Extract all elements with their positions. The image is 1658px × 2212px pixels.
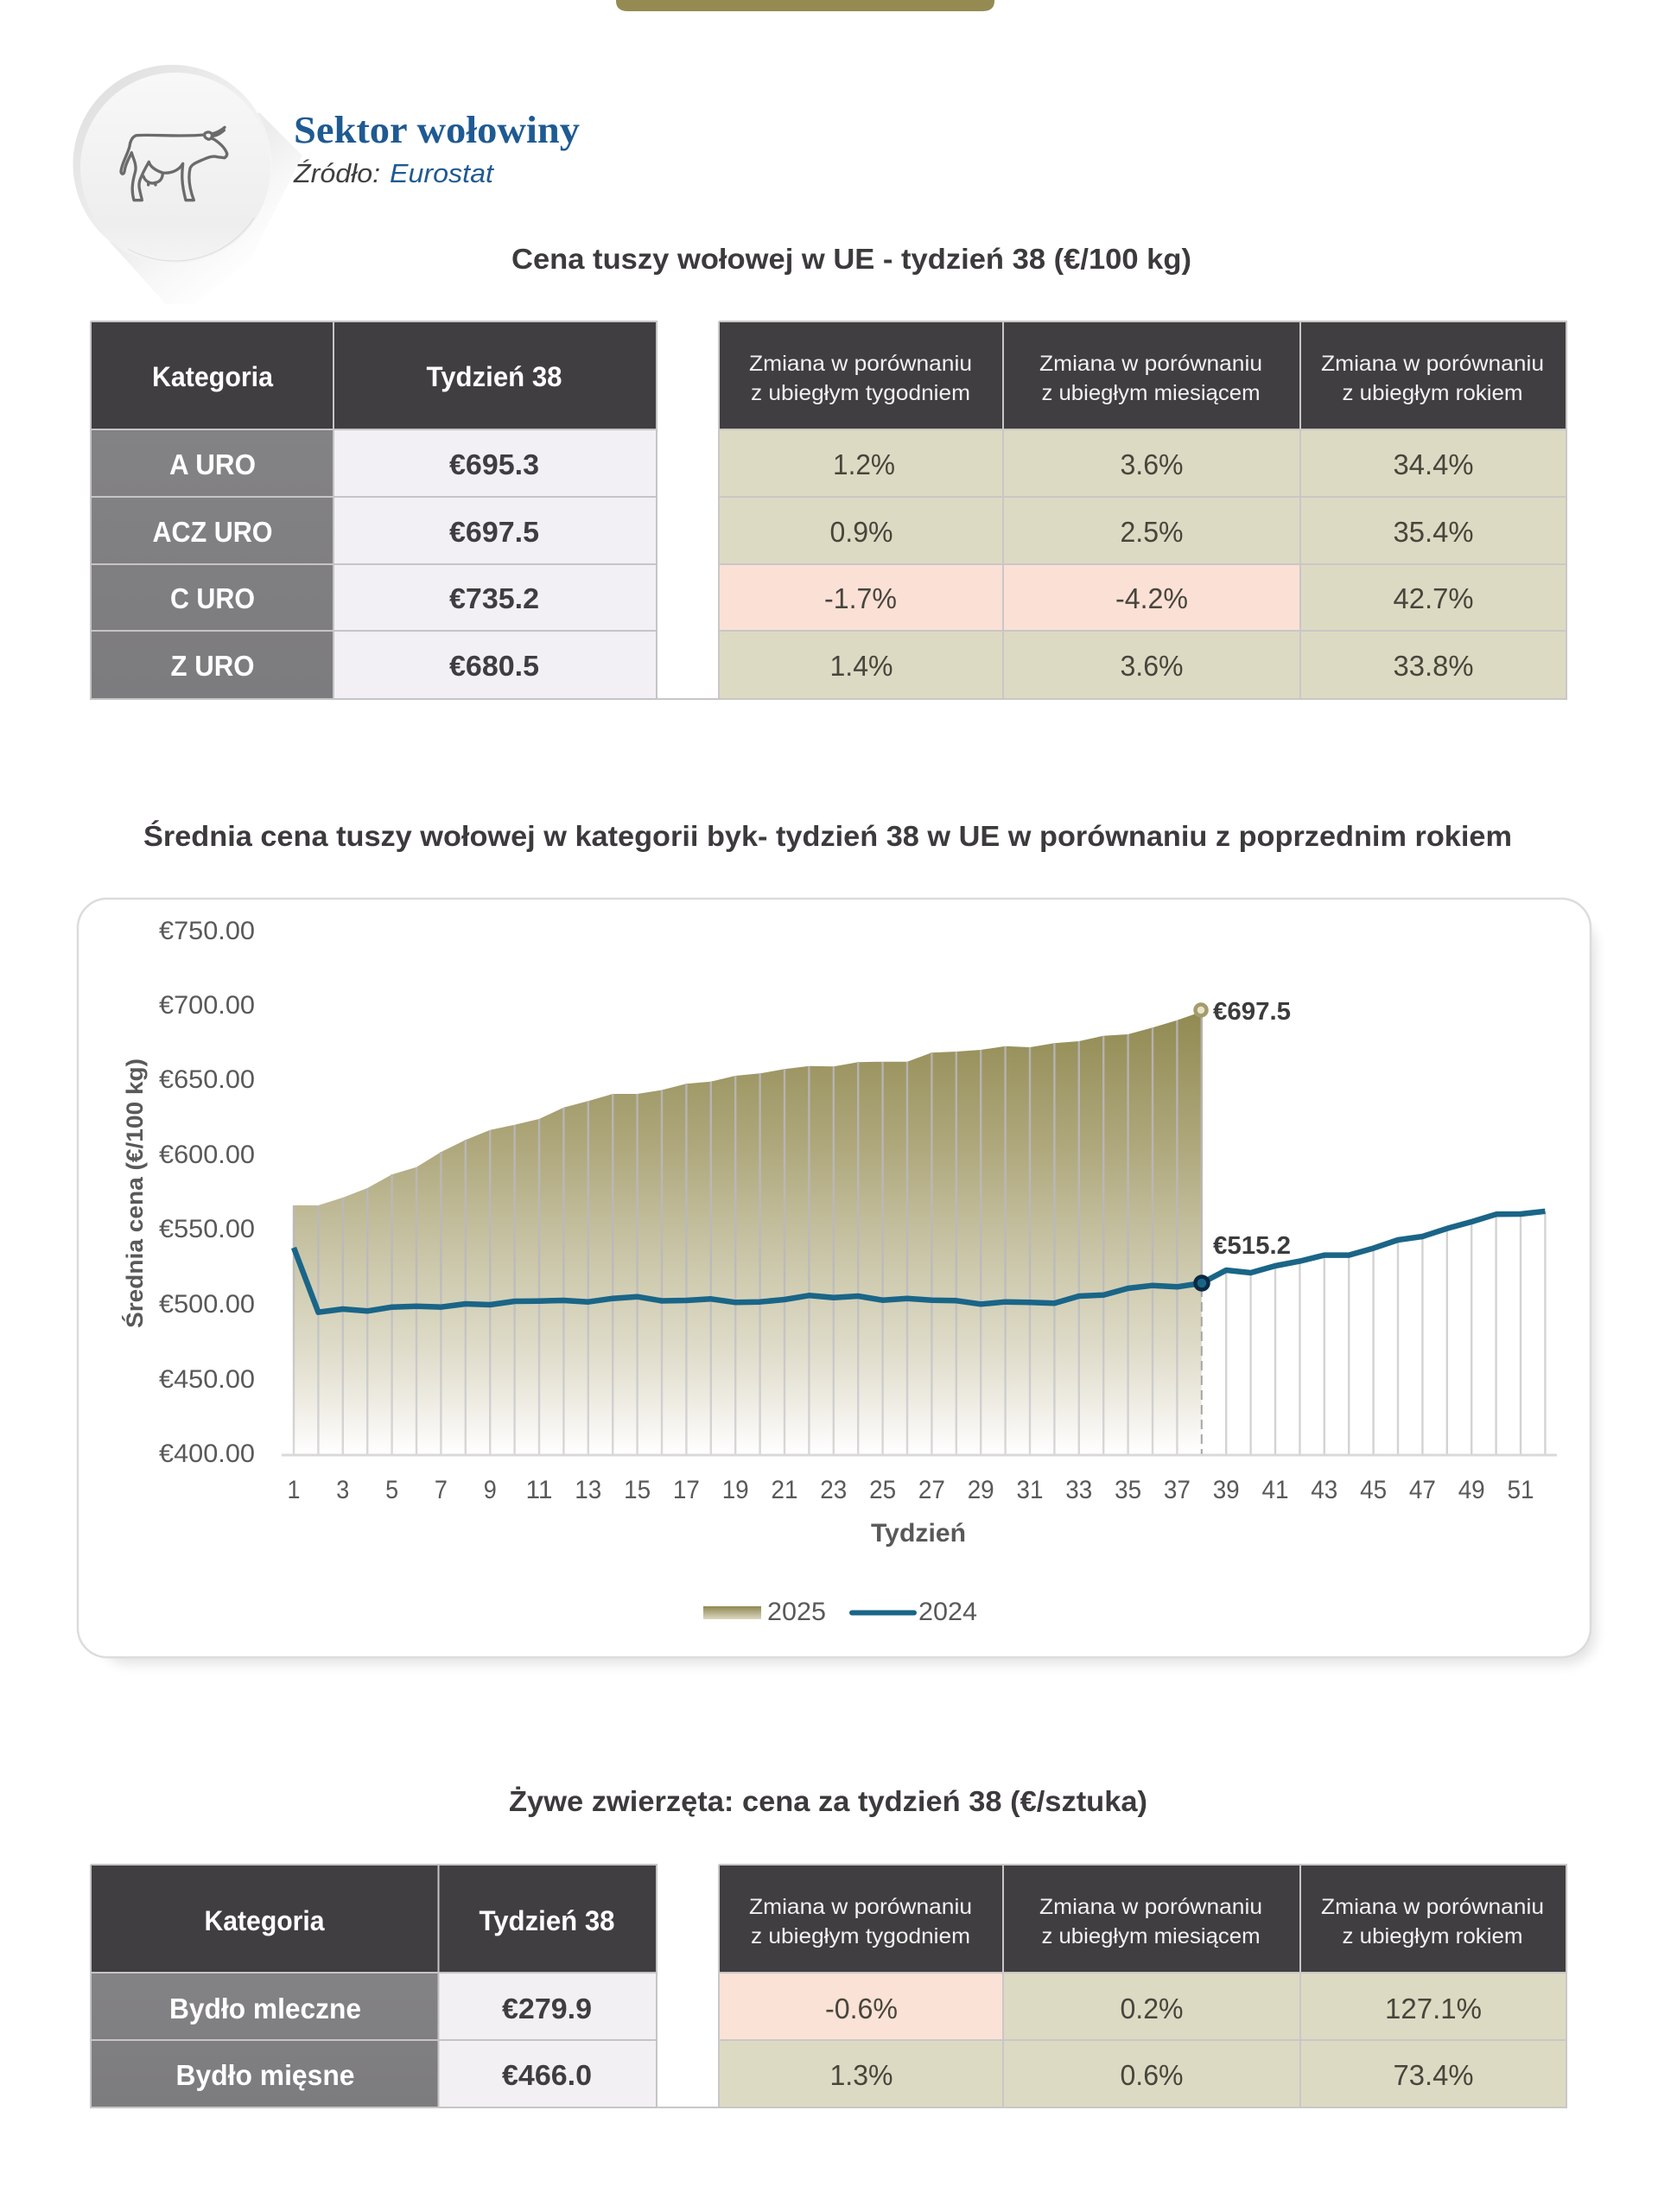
row: dairy cattle changes: 0.2% [1120, 1993, 1184, 2024]
panel: chart card [78, 899, 1596, 1664]
y axis labels [159, 917, 255, 1468]
row: Z URO [171, 650, 539, 682]
change table header row: z ubiegłym rokiem [1343, 381, 1522, 405]
row: dairy cattle changes: 127.1% [1385, 1993, 1482, 2024]
live change table header row: z ubiegłym tygodniem [751, 1924, 970, 1948]
row: C URO changes [824, 582, 1474, 614]
row: Z URO changes: 33.8% [1393, 650, 1474, 682]
legend: 2025 [767, 1598, 826, 1626]
row: dairy cattle [169, 1993, 592, 2024]
live table header row: Kategoria [204, 1905, 325, 1936]
x axis labels: 51 [1507, 1476, 1534, 1504]
row: dairy cattle changes: -0.6% [825, 1993, 898, 2024]
row: ACZ URO changes: 0.9% [829, 516, 893, 548]
row: A URO changes: 1.2% [833, 448, 895, 480]
y axis labels: €700.00 [159, 991, 255, 1020]
y axis title: Średnia cena (€/100 kg) [121, 1058, 148, 1328]
marker: week 38 of 2025 [1196, 1004, 1206, 1016]
row: beef cattle: Bydło mięsne [176, 2059, 354, 2091]
row: Z URO changes: 1.4% [829, 650, 893, 682]
row: ACZ URO changes: 35.4% [1393, 516, 1474, 548]
y axis labels: €650.00 [159, 1065, 255, 1094]
legend: 2024 [918, 1598, 977, 1626]
y axis labels: €600.00 [159, 1141, 255, 1169]
y axis labels: €450.00 [159, 1365, 255, 1394]
heading: chart title: Średnia cena tuszy wołowej w kategorii byk- tydzień 38 w UE w porównaniu z poprzednim rokiem [143, 820, 1512, 852]
x axis labels: 39 [1213, 1476, 1240, 1504]
row: Z URO changes [829, 650, 1474, 682]
live table header row [204, 1905, 615, 1936]
row: ACZ URO [152, 516, 539, 548]
live change table header row: Zmiana w porównaniu [749, 1895, 972, 1919]
row: dairy cattle changes [825, 1993, 1482, 2024]
x axis labels: 27 [918, 1476, 945, 1504]
y axis labels: €500.00 [159, 1290, 255, 1319]
row: dairy cattle: €279.9 [502, 1993, 592, 2024]
row: A URO changes: 34.4% [1393, 448, 1474, 480]
live change table header row: Zmiana w porównaniu [1321, 1895, 1544, 1919]
change table header row: z ubiegłym tygodniem [751, 381, 970, 405]
x axis labels: 3 [336, 1476, 349, 1504]
row: C URO [170, 582, 539, 614]
x axis labels: 33 [1065, 1476, 1092, 1504]
x axis labels: 31 [1016, 1476, 1044, 1504]
y axis labels: €750.00 [159, 917, 255, 945]
x axis labels: 17 [673, 1476, 700, 1504]
area: 2025 prices [294, 1012, 1202, 1454]
chart: average carcass price 2025 vs 2024 [121, 917, 1557, 1626]
x axis labels: 9 [484, 1476, 497, 1504]
x axis labels: 1 [287, 1476, 301, 1504]
row: beef cattle: €466.0 [502, 2059, 592, 2091]
x axis labels: 35 [1115, 1476, 1141, 1504]
row: A URO changes [833, 448, 1474, 480]
row: Z URO: €680.5 [449, 650, 539, 682]
x axis labels: 29 [968, 1476, 994, 1504]
x axis labels: 37 [1164, 1476, 1191, 1504]
heading: sector title: Sektor wołowiny [294, 109, 580, 151]
table: carcass price by category [91, 321, 657, 700]
row: A URO [169, 448, 539, 480]
y axis labels: €550.00 [159, 1215, 255, 1243]
row: A URO: €695.3 [449, 448, 539, 480]
row: A URO: A URO [169, 448, 256, 480]
live change table header row: Zmiana w porównaniu [1039, 1895, 1262, 1919]
row: ACZ URO: €697.5 [449, 516, 539, 548]
table header row: Kategoria [152, 361, 273, 392]
live change table header row: z ubiegłym miesiącem [1042, 1924, 1260, 1948]
x axis labels: 15 [624, 1476, 651, 1504]
table header row: Tydzień 38 [427, 361, 562, 392]
y axis labels: €400.00 [159, 1440, 255, 1468]
row: dairy cattle: Bydło mleczne [169, 1993, 361, 2024]
row: beef cattle changes: 73.4% [1393, 2059, 1474, 2091]
source line [293, 158, 494, 188]
x axis labels: 13 [575, 1476, 601, 1504]
row: ACZ URO changes [829, 516, 1474, 548]
marker: week 38 of 2024 [1196, 1277, 1208, 1289]
table header row [152, 361, 562, 392]
x axis labels: 41 [1261, 1476, 1289, 1504]
legend [703, 1598, 977, 1626]
icon: cow in grey disc [73, 65, 302, 304]
row: C URO: €735.2 [449, 582, 539, 614]
data label: 2025 value: €697.5 [1213, 998, 1291, 1026]
source line: Źródło: [293, 158, 380, 188]
x axis labels: 25 [869, 1476, 896, 1504]
heading: carcass price table: Cena tuszy wołowej w UE - tydzień 38 (€/100 kg) [511, 243, 1191, 275]
x axis labels: 23 [820, 1476, 847, 1504]
change table header row: Zmiana w porównaniu [1321, 352, 1544, 376]
line: 2024 prices [294, 1211, 1545, 1313]
x axis labels: 19 [722, 1476, 749, 1504]
table: live animal price changes [657, 1865, 1567, 2108]
x axis title: Tydzień [871, 1519, 966, 1548]
x axis labels: 47 [1409, 1476, 1436, 1504]
row: C URO changes: -4.2% [1115, 582, 1188, 614]
row: beef cattle changes [829, 2059, 1474, 2091]
change table header row: z ubiegłym miesiącem [1042, 381, 1260, 405]
top olive tab [616, 0, 994, 11]
row: ACZ URO: ACZ URO [152, 516, 273, 548]
row: A URO changes: 3.6% [1120, 448, 1184, 480]
drop lines after week 38 [1226, 1211, 1545, 1454]
x axis labels: 49 [1458, 1476, 1485, 1504]
x axis labels: 5 [385, 1476, 398, 1504]
x axis labels: 45 [1360, 1476, 1387, 1504]
table: live animal prices [91, 1865, 657, 2108]
data label: 2024 value: €515.2 [1213, 1232, 1291, 1260]
x axis labels: 7 [435, 1476, 448, 1504]
week 38 dashed marker line [1201, 1287, 1203, 1454]
x axis labels: 43 [1311, 1476, 1337, 1504]
live change table header row [749, 1895, 1544, 1948]
x axis labels: 21 [771, 1476, 798, 1504]
x axis labels: 11 [525, 1476, 553, 1504]
live change table header row: z ubiegłym rokiem [1343, 1924, 1522, 1948]
x axis line [282, 1453, 1557, 1457]
live table header row: Tydzień 38 [479, 1905, 615, 1936]
change table header row: Zmiana w porównaniu [749, 352, 972, 376]
week drop lines [294, 1012, 1202, 1454]
row: beef cattle changes: 1.3% [829, 2059, 893, 2091]
row: Z URO: Z URO [171, 650, 254, 682]
row: beef cattle [176, 2059, 592, 2091]
row: C URO changes: 42.7% [1393, 582, 1474, 614]
table: carcass price changes [657, 321, 1567, 700]
row: beef cattle changes: 0.6% [1120, 2059, 1184, 2091]
x axis labels [287, 1476, 1534, 1504]
change table header row: Zmiana w porównaniu [1039, 352, 1262, 376]
row: C URO: C URO [170, 582, 255, 614]
row: C URO changes: -1.7% [824, 582, 897, 614]
row: ACZ URO changes: 2.5% [1120, 516, 1184, 548]
heading: live animals table: Żywe zwierzęta: cena za tydzień 38 (€/sztuka) [509, 1785, 1147, 1817]
source line: Eurostat [390, 158, 494, 188]
row: Z URO changes: 3.6% [1120, 650, 1184, 682]
change table header row [749, 352, 1544, 405]
